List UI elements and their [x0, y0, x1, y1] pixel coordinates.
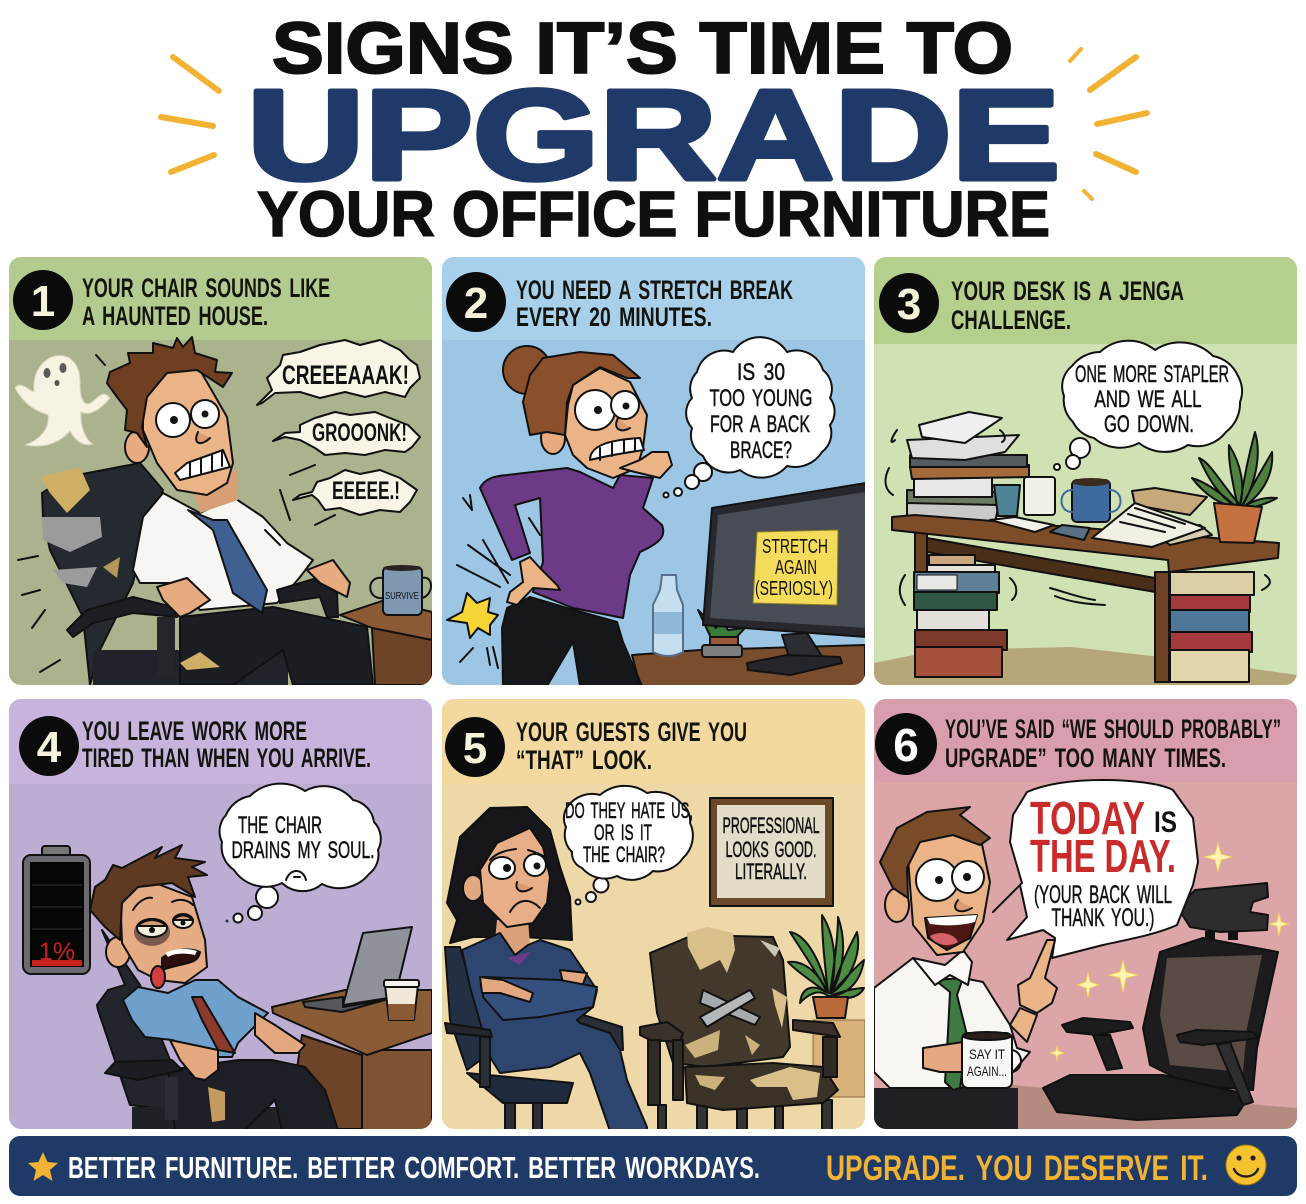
speech bubble: (YOUR BACK WILL: [1034, 881, 1172, 909]
man: body: [67, 493, 373, 685]
book stack under right of desk: [1170, 572, 1254, 682]
heading 1: [82, 278, 330, 326]
number badge 3: 3: [897, 280, 921, 329]
icon: star: [28, 1152, 58, 1181]
chair: [97, 930, 282, 1131]
heading 1: YOUR CHAIR SOUNDS LIKE: [82, 273, 330, 303]
speech bubble: DO THEY HATE US,: [565, 798, 693, 823]
items on desk: [990, 432, 1277, 547]
heading 5: [516, 717, 747, 775]
thought bubble: TOO YOUNG: [710, 385, 812, 412]
number badge 6: [875, 713, 937, 775]
creak motion marks: [18, 355, 335, 672]
icon: smiley: [1226, 1145, 1266, 1185]
monitor with sticky note: STRETCH: [762, 536, 828, 558]
number badge 1: [13, 270, 73, 330]
coffee mug: say it again: [962, 1032, 1021, 1088]
number badge 1: 1: [31, 277, 55, 326]
heading 6: [945, 714, 1281, 773]
number badge 2: 2: [464, 279, 488, 328]
wobble marks: [886, 430, 1270, 605]
wall sign: [710, 798, 833, 906]
bubble: eeeee: EEEEE.!: [332, 477, 400, 505]
speech bubble: THE CHAIR?: [583, 842, 665, 867]
ergonomic chair: [1043, 883, 1278, 1120]
icon: battery: 1%: [39, 938, 75, 966]
number badge 2: [446, 272, 506, 332]
icon: left sun rays: [161, 57, 219, 172]
man: body: [874, 940, 1057, 1130]
icon: ghost: [15, 356, 110, 446]
number badge 4: [19, 716, 79, 776]
wall sign: LITERALLY.: [735, 859, 807, 884]
heading 1: A HAUNTED HOUSE.: [82, 301, 268, 331]
desk with mug: [340, 565, 432, 685]
man: head: [107, 337, 238, 513]
number badge 6: 6: [893, 719, 919, 771]
speech bubble: [564, 786, 693, 904]
desk with bottle and plant: [632, 575, 865, 686]
heading 2: YOU NEED A STRETCH BREAK: [516, 275, 793, 305]
desk: [892, 515, 1279, 682]
monitor with sticky note: AGAIN: [775, 557, 817, 579]
heading 2: [516, 280, 793, 326]
footer banner: [9, 1136, 1297, 1196]
icon: battery: [23, 846, 90, 974]
speech bubble: IS: [1154, 806, 1177, 839]
bubble: eeeee: [293, 470, 417, 515]
damaged chair: [640, 927, 840, 1131]
desk with laptop and coffee: [272, 927, 432, 1130]
heading 5: “THAT” LOOK.: [516, 745, 652, 775]
panel: 2 stretch break: [442, 257, 866, 686]
speech bubble: OR IS IT: [594, 820, 652, 845]
man: slumped body: [105, 980, 338, 1130]
number badge 3: [879, 273, 939, 333]
bubble: creeeaaak: CREEEAAAK!: [282, 360, 409, 390]
chair: [40, 463, 288, 686]
bubble: grooonk: GROOONK!: [312, 419, 407, 447]
monitor with sticky note: [703, 483, 866, 675]
thought bubble: IS 30: [737, 359, 785, 386]
thought bubble: BRACE?: [730, 437, 792, 464]
speech bubble: THE DAY.: [1030, 830, 1176, 882]
speech bubble: THANK YOU.): [1052, 904, 1154, 932]
panel: 5 guests: [442, 699, 865, 1131]
heading 3: YOUR DESK IS A JENGA: [951, 276, 1184, 306]
panel: 6 today is the day: [874, 699, 1297, 1130]
footer slogan: BETTER FURNITURE. BETTER COMFORT. BETTER WORKDAYS.: [68, 1150, 760, 1185]
woman: head: [503, 346, 672, 478]
coffee mug: say it again: SAY IT: [969, 1046, 1005, 1062]
woman: body: [480, 468, 663, 686]
thought bubble: AND WE ALL: [1094, 386, 1202, 413]
thought bubble: GO DOWN.: [1104, 411, 1194, 438]
title line 1: SIGNS IT’S TIME TO: [272, 9, 1013, 89]
panel: 3 jenga desk: [874, 257, 1297, 686]
panel: 1 haunted chair: [9, 257, 432, 686]
thought bubble: DRAINS MY SOUL.: [232, 837, 374, 864]
speech bubble: TODAY: [1030, 792, 1145, 844]
heading 4: [82, 721, 370, 768]
wall sign: LOOKS GOOD.: [726, 837, 816, 862]
icon: pain star: [447, 495, 540, 668]
title line 3: YOUR OFFICE FURNITURE: [257, 178, 1050, 250]
thought bubble: [1054, 341, 1242, 470]
stack of papers on desk: [907, 412, 1029, 523]
title line 2: upgrade: UPGRADE: [247, 64, 1060, 207]
number badge 5: 5: [463, 724, 487, 773]
heading 4: TIRED THAN WHEN YOU ARRIVE.: [82, 743, 371, 773]
heading 3: [951, 281, 1184, 330]
icon: right sun rays: [1070, 49, 1147, 199]
heading 2: EVERY 20 MINUTES.: [516, 302, 712, 332]
title: [247, 9, 1060, 250]
monitor with sticky note: (SERIOSLY): [755, 578, 833, 600]
thought bubble: FOR A BACK: [710, 411, 810, 438]
heading 5: YOUR GUESTS GIVE YOU: [516, 717, 747, 747]
speech bubble: [993, 780, 1198, 958]
desk with mug: SURVIVE: [385, 591, 419, 602]
coffee mug: say it again: AGAIN...: [967, 1063, 1007, 1079]
bubble: grooonk: [273, 412, 420, 455]
plant and side table: [788, 915, 865, 1097]
number badge 5: [445, 717, 505, 777]
woman chair: [445, 947, 623, 1131]
man: head: [880, 807, 990, 955]
thought bubble: [664, 337, 835, 498]
thought bubble: THE CHAIR: [238, 812, 322, 839]
thought bubble: [220, 784, 381, 922]
heading 4: YOU LEAVE WORK MORE: [82, 716, 307, 746]
bubble: creeeaaak: [257, 340, 420, 405]
woman: [445, 807, 647, 1131]
wall sign: PROFESSIONAL: [722, 813, 820, 838]
heading 3: CHALLENGE.: [951, 305, 1071, 335]
number badge 4: 4: [37, 723, 62, 772]
book stack under left of desk: [914, 555, 1007, 677]
icon: sparkles: [1050, 843, 1289, 1062]
panel: 4 tired worker: [9, 699, 432, 1131]
man: tired head: [90, 845, 207, 988]
